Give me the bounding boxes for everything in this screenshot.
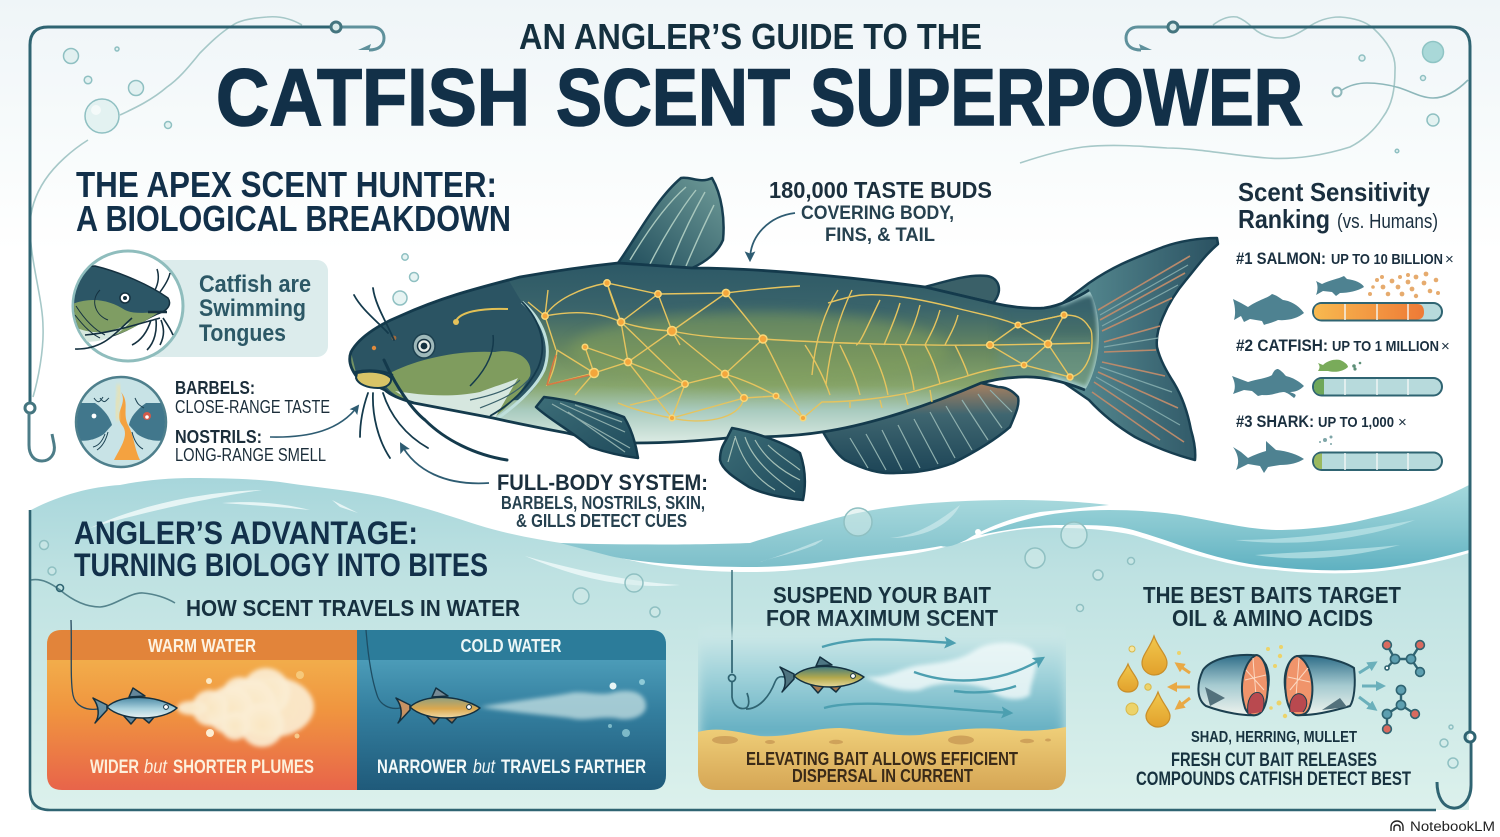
heading: scent sensitivity ranking: (vs. Humans) [1337, 211, 1438, 233]
head dark top [351, 276, 547, 403]
main title [216, 53, 1303, 143]
label: barbels and nostrils: BARBELS: [175, 378, 255, 398]
heading: scent sensitivity ranking: Scent Sensitivity [1238, 177, 1430, 207]
heading: best baits: THE BEST BAITS TARGET [1143, 582, 1401, 608]
lateral line head [456, 309, 508, 321]
hook and line [728, 640, 784, 709]
callout: full-body system: & GILLS DETECT CUES [516, 511, 687, 531]
cold caption: NARROWER [377, 757, 467, 778]
line and bait [71, 620, 98, 709]
network nodes [542, 280, 1073, 421]
heading: angler's advantage: ANGLER’S ADVANTAGE: [74, 515, 418, 551]
cold caption: but [473, 757, 496, 778]
callout: catfish are swimming tongues: Tongues [199, 320, 286, 347]
row: catfish [1232, 336, 1450, 398]
current arrows [822, 639, 1043, 713]
water background [31, 478, 1469, 810]
panel: cold water: COLD WATER [460, 636, 562, 656]
illustration: catfish with scent network [350, 178, 1218, 500]
row: catfish: UP TO 1 MILLION [1332, 338, 1439, 355]
label: barbels and nostrils: LONG-RANGE SMELL [175, 445, 326, 465]
sensory network lines [528, 283, 1092, 421]
oil drops [1118, 636, 1170, 727]
main title: SCENT [556, 53, 790, 143]
heading: apex scent hunter: A BIOLOGICAL BREAKDOWN [76, 198, 511, 239]
warm caption [90, 757, 314, 778]
row: salmon: × [1445, 251, 1454, 268]
heading: scent sensitivity ranking [1238, 177, 1438, 234]
callout: 180,000 taste buds: FINS, & TAIL [825, 225, 935, 246]
icon: bait fish, cold [396, 688, 480, 724]
panel: warm water [47, 620, 357, 790]
caption: fresh cut bait: COMPOUNDS CATFISH DETECT BEST [1136, 769, 1411, 790]
caption: fresh cut bait [1136, 750, 1411, 790]
warm caption: SHORTER PLUMES [173, 757, 314, 778]
row: shark [1233, 412, 1442, 473]
label: barbels and nostrils: NOSTRILS: [175, 427, 262, 447]
barbels [354, 288, 507, 460]
caption: DISPERSAL IN CURRENT [792, 766, 973, 786]
narrow plume [480, 691, 646, 719]
icon: molecule top [1383, 641, 1424, 676]
warm caption: WIDER [90, 757, 139, 778]
NotebookLM credit: NotebookLM [1410, 819, 1495, 834]
icon: catfish head [70, 251, 183, 361]
callout: full-body system [497, 470, 708, 531]
panel: scent sensitivity ranking [1232, 177, 1454, 473]
callout: catfish are swimming tongues: Catfish are [199, 271, 311, 298]
cold caption: TRAVELS FARTHER [501, 757, 646, 778]
main title: CATFISH [216, 53, 530, 143]
arrow: nostrils to fish [270, 406, 358, 437]
head details: eye, mouth and nostrils [355, 334, 435, 388]
heading: apex scent hunter [76, 164, 511, 239]
warm caption: but [144, 757, 168, 778]
body outline [350, 263, 1089, 443]
panel: suspend your bait [698, 582, 1066, 790]
label: barbels and nostrils [175, 378, 330, 465]
row: shark: #3 SHARK: [1236, 412, 1314, 431]
row: shark: UP TO 1,000 [1318, 414, 1394, 431]
callout: full-body system: FULL-BODY SYSTEM: [497, 470, 708, 495]
heading: best baits: OIL & AMINO ACIDS [1172, 605, 1373, 631]
cut bait right [1285, 656, 1355, 715]
arrow: full-body system [401, 444, 489, 483]
subheading: how scent travels: HOW SCENT TRAVELS IN WATER [186, 595, 520, 621]
callout: full-body system: BARBELS, NOSTRILS, SKIN, [501, 493, 705, 513]
icon: bait fish, warm [93, 688, 177, 724]
title line one: AN ANGLER’S GUIDE TO THE [519, 16, 982, 57]
panel: cold water [357, 630, 666, 790]
tail fin [1060, 238, 1218, 460]
row: catfish: × [1441, 338, 1450, 355]
heading: angler's advantage [74, 515, 488, 583]
heading: best baits [1143, 582, 1401, 631]
sand [698, 727, 1066, 790]
row: salmon: UP TO 10 BILLION [1331, 251, 1443, 268]
caption: fresh cut bait: FRESH CUT BAIT RELEASES [1171, 750, 1377, 771]
caption: ELEVATING BAIT ALLOWS EFFICIENT [746, 749, 1018, 769]
row: salmon [1233, 249, 1454, 325]
icon: molecule bottom [1382, 685, 1419, 733]
heading: scent sensitivity ranking: Ranking [1238, 204, 1330, 234]
icon: bait fish, suspended [780, 657, 864, 693]
row: catfish: #2 CATFISH: [1236, 336, 1328, 355]
heading: apex scent hunter: THE APEX SCENT HUNTER: [76, 164, 497, 205]
cold caption [377, 757, 646, 778]
cut bait left [1198, 655, 1269, 715]
main title: SUPERPOWER [810, 53, 1303, 143]
heading: suspend your bait: SUSPEND YOUR BAIT [773, 582, 991, 608]
row: salmon: #1 SALMON: [1236, 249, 1326, 268]
callout: 180,000 taste buds: 180,000 TASTE BUDS [769, 177, 992, 203]
scent wisp [864, 642, 1036, 699]
anal fin [822, 383, 1018, 473]
adipose fin [925, 276, 999, 303]
heading: angler's advantage: TURNING BIOLOGY INTO BITES [74, 547, 488, 583]
callout: catfish are swimming tongues: Swimming [199, 295, 306, 322]
heading: suspend your bait: FOR MAXIMUM SCENT [766, 605, 998, 631]
dorsal fin [618, 178, 724, 268]
panel: warm water: WARM WATER [148, 636, 256, 656]
arrow: taste buds [750, 213, 795, 260]
cloud plume [177, 668, 314, 747]
label: barbels and nostrils: CLOSE-RANGE TASTE [175, 397, 330, 417]
pectoral fin [536, 397, 638, 458]
callout: 180,000 taste buds [769, 177, 992, 246]
panel: best baits [1118, 582, 1424, 790]
row: shark: × [1398, 414, 1407, 431]
callout: catfish are swimming tongues [70, 251, 328, 361]
caption [746, 749, 1018, 786]
pelvic fin [720, 428, 805, 500]
caption: bait species: SHAD, HERRING, MULLET [1191, 729, 1357, 746]
icon: barbels and nostrils sensing scent [76, 377, 166, 467]
heading: suspend your bait [766, 582, 998, 631]
fish body [350, 263, 1099, 443]
callout: 180,000 taste buds: COVERING BODY, [801, 203, 954, 224]
